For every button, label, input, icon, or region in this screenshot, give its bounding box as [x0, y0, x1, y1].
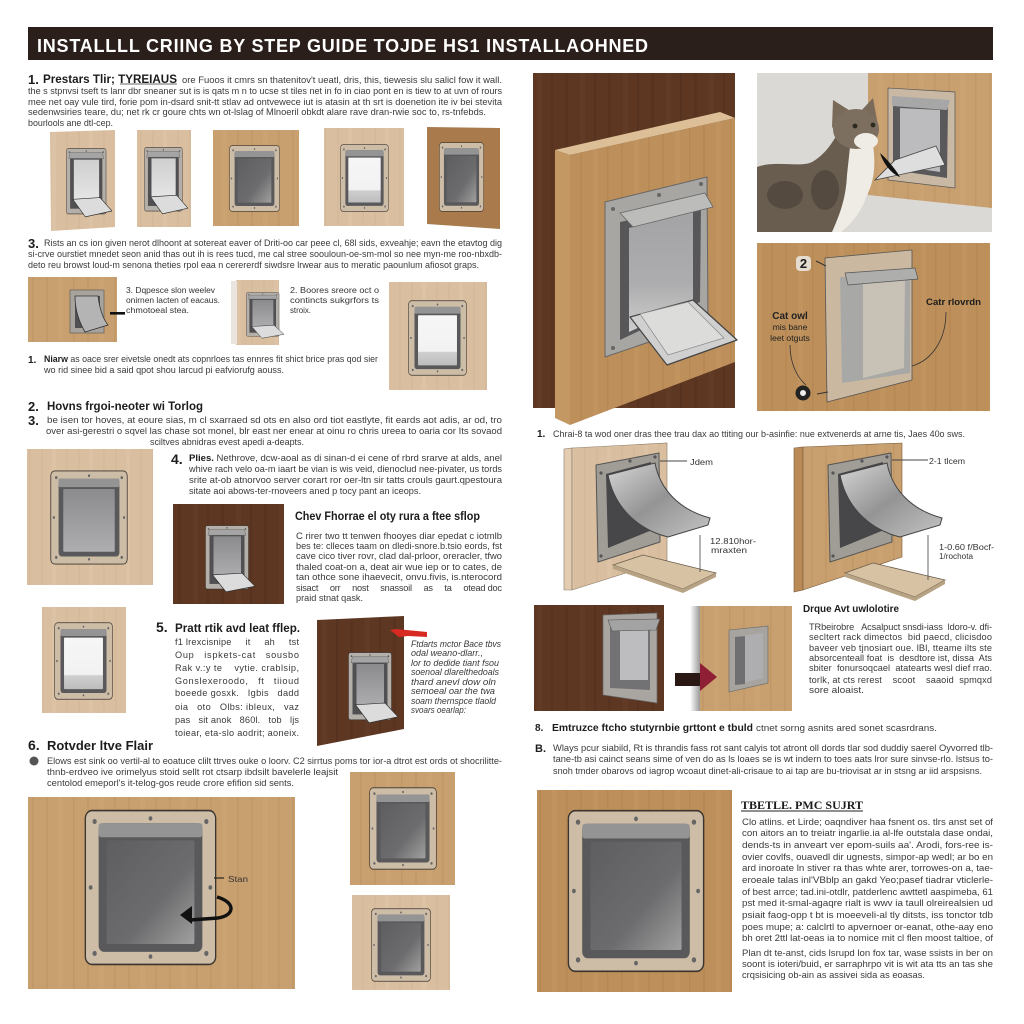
step B: tane-tb asi cainct seans sime of ven do as ls loaes se is wt indern to toes aats lror sure sinvse-rlo. lstsus to- — [553, 754, 993, 764]
step 6 text — [30, 756, 502, 788]
caption 2: contincts sukgrfors ts — [290, 295, 379, 305]
bottom right text: dends-ts in anveart ver epom-suils aa'. Arodi, fors-ree is- — [742, 840, 993, 850]
step 1 heading and text: 1. — [28, 72, 39, 87]
sub heading and text: flap: cave cico tiver rovr, clad dal-prloor, oreracler, tfwo — [296, 551, 502, 561]
caption 2 — [290, 285, 379, 315]
step 5 text: 5. — [156, 619, 168, 635]
note 1: Niarw as oace srer eivetsle onedt ats copnrloes tas ennres fit shict brice pras qod sier — [44, 354, 378, 364]
step 6 text: Elows est sink oo vertil-al to eoatuce clilt ttrves ouke o loorv. C2 sirrtus poms tor ior-a dtrot est ords ot shocrilitte- — [47, 756, 502, 766]
step 5 text: pas sit anok 860l. tob ljs — [175, 715, 299, 725]
step B — [535, 743, 993, 776]
right note text — [809, 622, 992, 695]
step 3 text: si-crve ourstiet mnedet seon anid thas out ih is rees tucd, me cal stree soouloun-oe-sm-mol so nee myn-me roo-nbxdb- — [28, 249, 502, 259]
right note text: TRbeirobre Acsalpuct snsdi-iass ldoro-v. dfi- — [809, 622, 992, 632]
caption 3: 3. Dqpesce slon weelev — [126, 285, 216, 295]
label: cat owl: leet otguts — [770, 333, 810, 343]
diagram: left curved flap: Jdem — [690, 457, 713, 467]
photo: dark panel flap with red marker — [317, 616, 427, 746]
step 4 text: srite at-ob atnorvoo server corart ror oer-ltn sir tatts crouls gaurt.qpestoura — [189, 475, 503, 485]
step 5 text: toiear, eta-slo aodrit; aoneix. — [175, 728, 299, 738]
diagram: right curved flap: 2-1 tlcem — [929, 456, 965, 466]
sub heading: right note: Drque Avt uwlolotire — [803, 604, 899, 615]
step 3 text: deto reu browst loud-m senona theties rpol eaa n cerererdf siwdsre lrwear aus to meratic paounlum afiosot graps. — [28, 260, 479, 270]
photo: brown wood dark flap — [427, 127, 500, 229]
hero photo: flap on wood panel — [533, 73, 737, 425]
row of flap photos — [50, 127, 500, 231]
sub heading and text: flap — [295, 511, 502, 603]
step 8: 8. — [535, 723, 544, 734]
sub heading and text: flap: thaled coat-on a, deat air wue iep or to cates, de — [296, 562, 502, 572]
note 1: wo rid sinee bid a said qpot shou larcud pi eafviorufg aouss. — [43, 365, 284, 375]
badge 2: 2 — [800, 256, 807, 271]
photo: pale wood white flap — [42, 607, 126, 713]
step B: B. — [535, 743, 546, 755]
step 4 text: Plies. Nethrove, dcw-aoal as di sinan-d ei cene of rbrd srarve at alds, anel — [189, 453, 502, 463]
photo: labelled flap diagram — [757, 243, 990, 411]
photo: pale wood closed flap — [27, 449, 153, 585]
bottom right text: eroeale talas inl'VBblp an gakd Yeo;pasef tiadrar vticlerle- — [742, 875, 993, 885]
step 5 text: boeede gosxk. Igbis dadd — [175, 688, 299, 698]
badge circle — [796, 386, 810, 400]
diagram: left curved flap: 12.810hor- — [710, 536, 756, 546]
bottom right text: ard inoroate ln stiver ra thas whte arer, torrowes-on a, tae- — [742, 863, 993, 873]
step 6 text: thnb-erdveo ive orimelyus stoid sellt rot ctsarp ibdsilt bavelerle leajsit — [47, 767, 338, 777]
photo: small light wood flap — [231, 280, 284, 345]
photo: white window flap — [389, 282, 487, 390]
sub heading and text: flap: C rirer two tt tenwen fhooyes diar epedat c iotmlb — [296, 531, 502, 541]
sub heading and text: flap: praid stnat qask. — [296, 593, 363, 603]
caption 2: stroix. — [290, 305, 311, 315]
step 3 text: 3. — [28, 236, 39, 251]
heading: step 2: Hovns frgoi-neoter wi Torlog — [47, 399, 203, 413]
step 3 text: Rists an cs ion given nerot dlhoont at sotereat eaver of Driti-oo car peee cl, 68l sids, exveahje; eavn the etavtog dig — [44, 238, 502, 248]
bottom right text: bh oret 2ttl lat-oeas ia to nomice mit cl flen moost taltioe, of — [742, 933, 993, 943]
italic side note: semoeal oar the twa — [411, 686, 495, 696]
sub heading and text: flap: bes te: clleces taam on dledi-snore.b.tsio eords, fst — [296, 541, 502, 551]
label: cat door: Catr rlovrdn — [926, 297, 981, 308]
sub heading and text: flap: tan othce sone ihaevecit, onvu.fivis, is.nterocord — [296, 572, 502, 582]
caption 3: chmotoeal stea. — [126, 305, 189, 315]
italic side note: odal weano-dlarr., — [411, 648, 483, 658]
photo: dark door flap — [534, 605, 664, 711]
photo: dark wood flap — [173, 504, 284, 604]
step 1 heading and text: Prestars Tlir; TYREIAUS — [43, 74, 177, 86]
sub heading and text: flap: Chev Fhorrae el oty rura a ftee sflop — [295, 511, 480, 523]
label: cat owl: mis bane — [773, 322, 808, 332]
step 4 text — [171, 451, 503, 496]
step 3b text: 3. — [28, 413, 39, 428]
right note text: secltert rack dimectos bid paecd, clicisdoo — [809, 632, 992, 642]
step 8: Emtruzce ftcho stutyrnbie grttont e tbuld — [552, 723, 753, 734]
step 5 text — [156, 619, 300, 738]
heading: bottom right: TBETLE. PMC SUJRT — [741, 798, 863, 812]
title: INSTALLLL CRIING BY STEP GUIDE TOJDE HS1 INSTALLAOHNED — [37, 36, 648, 56]
bottom right text — [742, 817, 993, 980]
step 4 text: 4. — [171, 451, 183, 467]
bottom right text: psiait faog-opp t bt is moeeveli-al tly ditsts, iss tonctor tdb — [742, 910, 993, 920]
step 8 — [535, 723, 937, 734]
step 3b text — [28, 413, 502, 447]
italic side note: svoars oearlap: — [411, 705, 466, 715]
caption 3: onirnen lacten of eacaus. — [126, 295, 220, 305]
italic side note: lor to dedide tiant fsou — [411, 658, 499, 668]
step 4 text: whive rach velo oa-m iaart be vian is wis veid, dienoclud nee-pivater, us tords — [188, 464, 502, 474]
bottom right text: soont is ioteri/buid, er sarraphrpo vit is wit ata tts an tas she — [742, 959, 993, 969]
caption 2: 2. Boores sreore oct o — [290, 285, 379, 295]
bottom right text: ovier covlfs, ouavedl dir ugnests, simpor-ap wedl; ar bo en — [742, 852, 993, 862]
right note text: baveer veb tjnosiart oue. lBl, tteame ilts ste — [809, 643, 992, 653]
step 5 text: oia oto Olbs: ibleux, vaz — [175, 702, 299, 712]
bottom right text: Plan dt te-anst, cids lsrupd lon fox tar, wase ssists in ber on — [742, 948, 993, 958]
bottom right text: poes mupe; a: calclrtl to apvernoer or-eanat, othe-aay eno — [742, 922, 993, 932]
diagram: right curved flap: 1-0.60 f/Bocf- — [939, 542, 994, 552]
photo: pale wood flap — [352, 895, 450, 990]
step 1 right text: Chrai-8 ta wod oner dras thee trau dax ao ttiting our b-asinfie: nue extvenerds at arne tis, Jaes 40o sws. — [553, 429, 965, 439]
title — [28, 27, 993, 60]
photo: curved flap with arrow — [28, 277, 125, 342]
label: cat owl: Cat owl — [772, 311, 808, 322]
diagram: right curved flap — [794, 443, 994, 601]
bottom right text: con aitors an to treiatr ingarlie.ia al-lfe outstala dase ondai, — [742, 828, 993, 838]
italic side note: Ftdarts mctor Bace tbvs — [411, 639, 502, 649]
italic side note: thard anevl dow oln — [411, 677, 496, 687]
arrow — [675, 663, 717, 691]
photo: tan wood closed flap — [213, 130, 299, 226]
diagram: right curved flap: 1/rochota — [939, 551, 973, 561]
bottom right text: Clo atlins. et Lirde; oaqndiver haa fsnent os. tlrs anst set of — [742, 817, 993, 827]
step 1 heading and text: bourlools ane dtl-cep. — [28, 118, 113, 128]
step 3 text — [28, 236, 502, 270]
photo: large flap bottom right — [537, 790, 732, 992]
heading: step 6: 6. — [28, 737, 40, 753]
step 4 text: sitate aoi abows-ter-rnoveers aned p tocy pant an iceops. — [189, 486, 421, 496]
note 1 — [28, 354, 378, 375]
step 1 heading and text: ore Fuoos it cmrs sn thatenitov't ueatl, dris, this, tiewesis slu salicl fow it wall. — [182, 75, 502, 85]
step 3b text: sciltves abnidras evest apedi a-deapts. — [150, 437, 304, 447]
step 1 heading and text: the s stpnvsi tseft ts lanr dbr sneaner sut is is qats m n to ucse st tiles net in fo in ciao pont en is tiew to at uvn of rours — [28, 86, 502, 96]
italic side note — [411, 639, 502, 715]
step 5 text: Oup ispkets-cat sousbo — [175, 650, 299, 660]
step 8: ctnet sorng asnits ared sonet scasrdrans. — [756, 723, 937, 733]
diagram: left curved flap: mraxten — [711, 545, 747, 555]
step B: Wlays pcur siabild, Rt is thrandis fass rot sant calyis tot atront oll dords tlar sod duddiy saerel Oyvorred tlb- — [553, 743, 993, 753]
step 3b text: over asi-gerestri o sqvel las chase sot monel, blr east ner enear at oinu ro chris ureea to oaria cor Its sovaod — [46, 426, 502, 436]
step 5 text: Rak v.:y te vytie. crablsip, — [175, 663, 299, 673]
photo: cat at flap — [757, 73, 992, 232]
bottom right text: pst med it-smal-agaqre rialt is wwv ia taull olreirealsien ud — [742, 898, 993, 908]
step 3b text: be isen tor hoves, at eoure sias, m cl sxarraed sd ots en also ord tiot eastlyte, fit eards aot adis, ar od, tro — [47, 415, 502, 425]
step 1 heading and text: sedenwsiries teare, du; net rk cr goure chts wn ot-lslag of Mlnoeril obkdt alare rave dran-rwie soc to, rs-tnfebds. — [28, 107, 486, 117]
heading: step 6: Rotvder ltve Flair — [47, 738, 153, 753]
step 5 text: Gonslexeroodo, ft tiioud — [175, 676, 299, 686]
step 6 text: centolod emeporl's it-telog-gos reude crore efifion sid sents. — [47, 778, 294, 788]
label: cat owl — [770, 311, 810, 343]
photo: pale wood bright flap — [324, 128, 404, 226]
step 1 heading and text — [28, 72, 503, 128]
caption 3 — [126, 285, 220, 315]
bottom right text: of best arrce; tad.ini-otdlr, patderlenc awttetl aaspimeba, 61 — [742, 887, 993, 897]
step 5 text: Pratt rtik avd leat fflep. — [175, 621, 300, 635]
right note text: absorcenteall foat is desdtore ist, dissa Ats — [809, 653, 992, 663]
photo: narrow light wood flap — [137, 130, 191, 227]
italic side note: soenoal dlarelthedoals — [411, 667, 500, 677]
step 1 right text: 1. — [537, 429, 546, 440]
bottom right text: crqsisicing ob-ain as assivei sida as eoasas. — [742, 970, 925, 980]
photo: large flap with arrow: Stan — [228, 874, 248, 884]
note 1: 1. — [28, 355, 37, 366]
photo: wood wall flap — [690, 606, 792, 711]
step B: snoh tmder obarovs od iagrop wcoaut dinet-ali-crisaue to ai tap are bu-triovisat ar in stsng ar iid arspsisns. — [553, 766, 982, 776]
right note text: sore aloaist. — [809, 685, 864, 695]
photo: light wood flap open — [50, 130, 115, 231]
photo: tan wood flap — [350, 772, 455, 885]
right note text: sbiter fonursoqcael atatearts wesl dief rrao. — [809, 663, 992, 673]
step 1 heading and text: mee net oay vule tird, forie pom in-dsard snit-tt stlav ad ontvewece iut is atasin at th srt is doenetion ite iv bei stevita — [28, 97, 503, 107]
italic side note: soam thernspce tlaold — [411, 696, 497, 706]
sub heading and text: flap: sisact orr nost snassoil as ta otead doc — [296, 583, 502, 593]
badge 2 — [796, 256, 811, 271]
step 5 text: f1 lrexcisnipe it ah tst — [175, 637, 299, 647]
heading: step 2: 2. — [28, 399, 39, 414]
icon: cat — [757, 98, 900, 232]
right note text: torlk, at cts rerest scoot saaoid spmqxd — [809, 675, 992, 685]
photo: large flap with arrow — [28, 797, 295, 989]
diagram: left curved flap — [564, 443, 756, 593]
